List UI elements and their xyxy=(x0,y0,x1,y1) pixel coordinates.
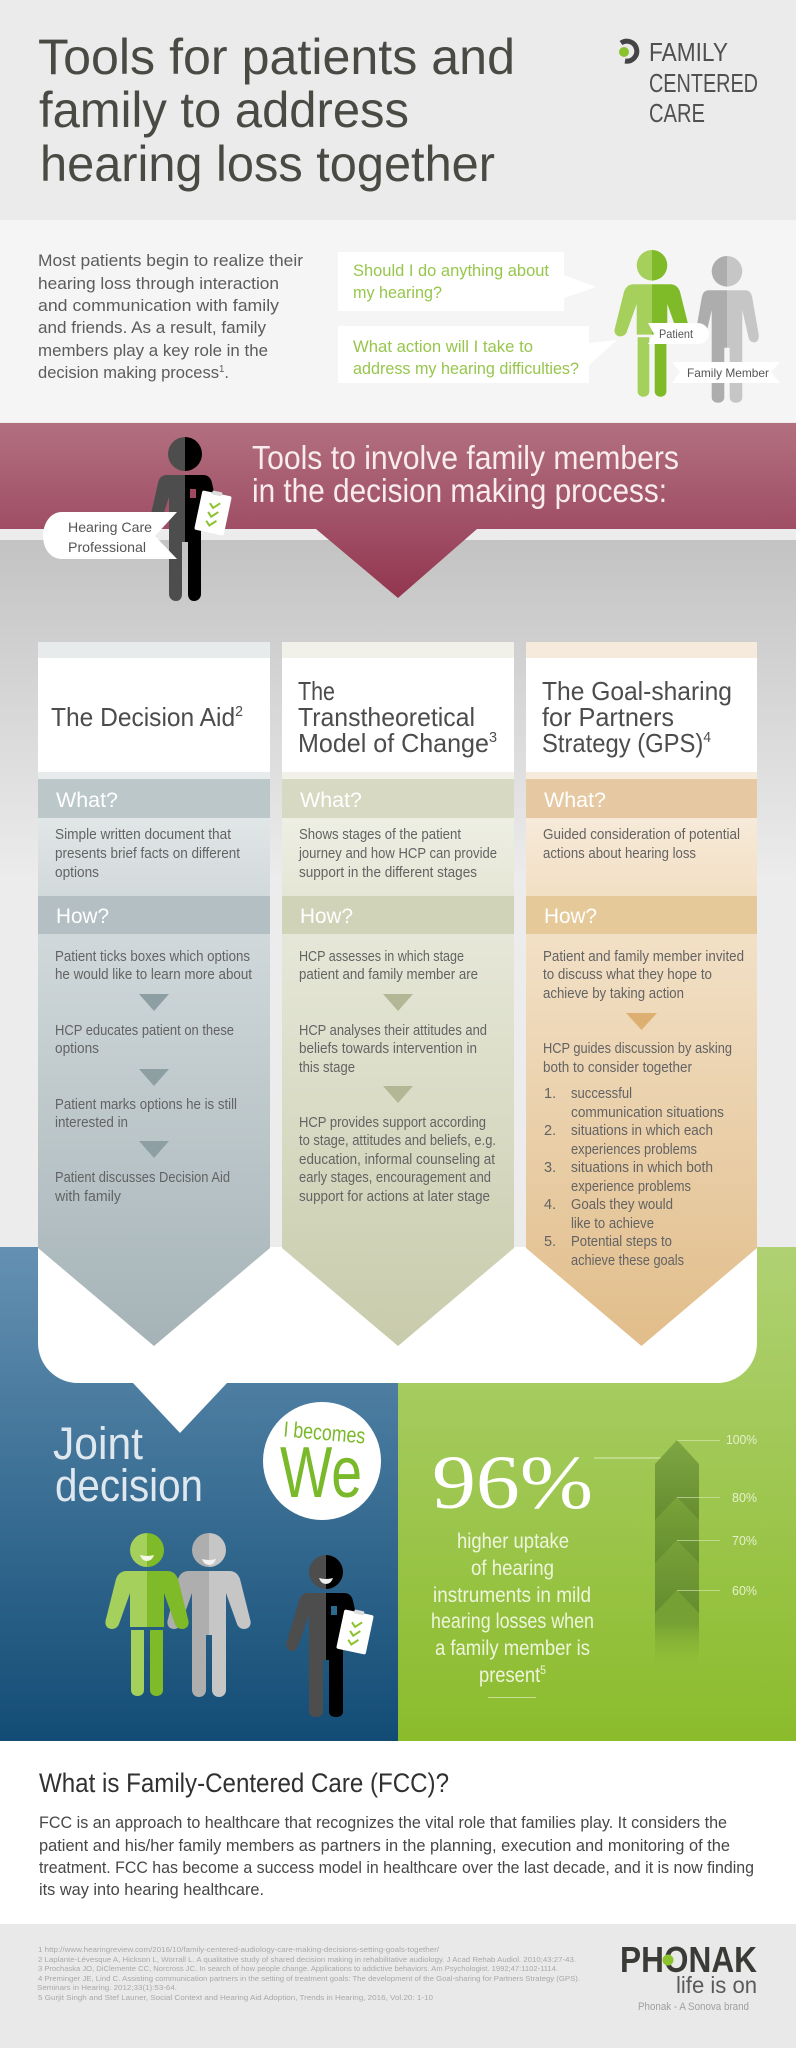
how steps: HCP assesses in which stage xyxy=(299,949,464,965)
how steps xyxy=(299,949,496,1205)
logo wordmark xyxy=(649,37,758,128)
label: hearing care professional: Hearing Care xyxy=(68,519,152,535)
heading xyxy=(542,676,732,758)
Phonak logo: Phonak - A Sonova brand xyxy=(638,2001,749,2013)
statistic: 96%: 96% xyxy=(432,1441,593,1525)
how steps: HCP educates patient on these xyxy=(55,1023,234,1039)
footnotes: 3 Prochaska JO, DiClemente CC, Norcross JC. In search of how people change. Applications to addictive behaviors. Am Psychologist. 1992;47:1102-1114. xyxy=(38,1964,558,1973)
icon: family member figure xyxy=(695,256,759,403)
intro text: Most patients begin to realize their xyxy=(38,251,303,270)
how steps: this stage xyxy=(299,1060,355,1076)
body text xyxy=(39,1813,754,1899)
numbered list: like to achieve xyxy=(571,1216,654,1232)
intro text: . xyxy=(224,363,229,382)
icon: hearing care professional xyxy=(149,437,232,601)
icon: patient figure smiling xyxy=(105,1533,189,1696)
white rounded panel with pointer xyxy=(38,1247,757,1433)
Family Centered Care logo xyxy=(619,37,758,128)
heading: The Goal-sharing xyxy=(542,676,732,706)
footnotes: Seminars in Hearing. 2012;33(1):53-64. xyxy=(37,1983,177,1992)
heading: 3 xyxy=(489,729,497,746)
intro text: decision making process xyxy=(38,363,224,382)
scale labels: 70% xyxy=(732,1533,757,1548)
banner xyxy=(0,423,796,598)
icon: ring with green dot xyxy=(619,41,637,61)
how label: How? xyxy=(544,905,597,928)
title: Tools for patients and xyxy=(38,29,515,85)
logo wordmark: FAMILY xyxy=(649,37,728,67)
what text xyxy=(543,827,740,862)
badge: I becomes We xyxy=(263,1402,381,1520)
numbered list xyxy=(544,1086,724,1269)
what label: What? xyxy=(300,789,362,812)
badge: I becomes We: We xyxy=(280,1433,362,1513)
statistic description xyxy=(431,1530,594,1698)
logo wordmark: CENTERED xyxy=(649,68,758,98)
how steps: to discuss what they hope to xyxy=(543,967,712,983)
body text: patient and his/her family members as partners in the planning, execution and monitoring of the xyxy=(39,1836,730,1855)
Phonak logo xyxy=(620,1939,757,2013)
what text: options xyxy=(55,865,99,881)
intro text: members play a key role in the xyxy=(38,341,268,360)
numbered list: Potential steps to xyxy=(571,1234,672,1250)
heading: for Partners xyxy=(542,702,674,732)
what label: What? xyxy=(56,789,118,812)
numbered list: 1. xyxy=(544,1086,556,1102)
scale labels: 60% xyxy=(732,1583,757,1598)
what text xyxy=(55,827,240,881)
how steps: Patient marks options he is still xyxy=(55,1097,237,1113)
body text: FCC is an approach to healthcare that recognizes the vital role that families play. It considers the xyxy=(39,1813,727,1832)
title xyxy=(38,29,515,192)
what text: Simple written document that xyxy=(55,827,231,843)
heading xyxy=(298,676,497,758)
footnotes: 5 Gurjit Singh and Stef Launer, Social Context and Hearing Aid Adoption, Trends in Hearing, 2016, Vol.20: 1-10 xyxy=(38,1993,433,2002)
how steps xyxy=(54,949,252,1205)
label: patient: Patient xyxy=(659,327,694,341)
intro text: hearing loss through interaction xyxy=(38,274,279,293)
label: hearing care professional xyxy=(43,512,177,559)
how steps: HCP provides support according xyxy=(299,1115,486,1131)
intro text xyxy=(38,251,303,382)
heading: 2 xyxy=(235,703,243,720)
footnotes: 4 Preminger JE, Lind C. Assisting communication partners in the setting of treatment goals: The development of the Goal-sharing for Partners Strategy (GPS). xyxy=(38,1974,580,1983)
what text: actions about hearing loss xyxy=(543,846,696,862)
icon: professional figure smiling xyxy=(286,1555,374,1717)
intro text: 1 xyxy=(219,364,225,375)
numbered list: situations in which each xyxy=(571,1123,713,1139)
numbered list: successful xyxy=(571,1086,632,1102)
how steps: early stages, encouragement and xyxy=(299,1170,491,1186)
speech bubble: second question: What action will I take to xyxy=(353,337,533,356)
heading: Transtheoretical xyxy=(298,702,475,732)
how steps: interested in xyxy=(55,1115,128,1131)
statistic description: a family member is xyxy=(435,1637,590,1660)
label: patient xyxy=(648,323,709,344)
what text: journey and how HCP can provide xyxy=(298,846,497,862)
numbered list: experiences problems xyxy=(571,1142,697,1158)
icon: patient figure xyxy=(615,250,689,397)
body text: treatment. FCC has become a success model in healthcare over the last decade, and it is now finding xyxy=(39,1858,754,1877)
body text: its way into hearing healthcare. xyxy=(39,1880,264,1899)
how steps: to stage, attitudes and beliefs, e.g. xyxy=(299,1133,496,1149)
scale labels: 100% xyxy=(726,1432,757,1447)
joint decision heading: Joint xyxy=(53,1418,143,1469)
panel: column 2, transtheoretical model xyxy=(282,642,514,1346)
numbered list: communication situations xyxy=(571,1105,724,1121)
what text: Shows stages of the patient xyxy=(299,827,461,843)
blue section background xyxy=(0,1247,398,1741)
intro text: and communication with family xyxy=(38,296,280,315)
how steps: Patient ticks boxes which options xyxy=(55,949,250,965)
speech bubble: first question: Should I do anything about xyxy=(353,261,549,280)
speech bubble: first question: my hearing? xyxy=(353,283,442,302)
how steps: education, informal counseling at xyxy=(299,1152,495,1168)
heading: Model of Change xyxy=(298,728,496,758)
label: family member xyxy=(672,362,780,383)
speech bubble: second question: address my hearing difficulties? xyxy=(353,359,579,378)
panel: column 1, the decision aid xyxy=(38,642,270,1346)
chart: upward arrow scale xyxy=(655,1432,757,1672)
how steps: HCP analyses their attitudes and xyxy=(299,1023,487,1039)
page background below banner xyxy=(0,422,796,1250)
panel: footer xyxy=(0,1924,796,2048)
joint decision heading xyxy=(53,1418,203,1511)
speech bubble: first question xyxy=(338,252,596,311)
numbered list: experience problems xyxy=(571,1179,691,1195)
numbered list: 2. xyxy=(544,1123,556,1139)
footnotes: 1 http://www.hearingreview.com/2016/10/family-centered-audiology-care-making-decisions-setting-goals-together/ xyxy=(38,1945,440,1954)
title: hearing loss together xyxy=(40,136,495,192)
speech bubble: second question xyxy=(338,326,617,383)
how steps: beliefs towards intervention in xyxy=(299,1041,477,1057)
banner heading xyxy=(252,439,679,509)
statistic description: 5 xyxy=(540,1663,546,1677)
numbered list: 5. xyxy=(544,1234,556,1250)
what text: support in the different stages xyxy=(299,865,477,881)
statistic description: present xyxy=(479,1664,549,1687)
how label: How? xyxy=(300,905,353,928)
how steps xyxy=(543,949,744,1076)
heading: Strategy (GPS) xyxy=(542,728,718,758)
Phonak logo: life is on xyxy=(676,1972,757,1998)
numbered list: Goals they would xyxy=(571,1197,673,1213)
scale labels xyxy=(726,1432,757,1598)
header background xyxy=(0,0,796,220)
banner heading: Tools to involve family members xyxy=(252,439,679,476)
logo wordmark: CARE xyxy=(649,98,705,128)
heading: 4 xyxy=(703,729,711,746)
heading: What is Family-Centered Care (FCC)? xyxy=(39,1768,449,1798)
joint decision heading: decision xyxy=(55,1460,203,1511)
numbered list: 4. xyxy=(544,1197,556,1213)
numbered list: 3. xyxy=(544,1160,556,1176)
title: family to address xyxy=(39,82,409,138)
heading: The Decision Aid xyxy=(51,702,246,732)
label: family member: Family Member xyxy=(687,366,769,380)
green section background xyxy=(398,1247,796,1741)
how steps: patient and family member are xyxy=(299,967,478,983)
scale labels: 80% xyxy=(732,1490,757,1505)
badge: I becomes We: I becomes xyxy=(283,1416,366,1449)
icon: family member figure smiling xyxy=(167,1533,251,1697)
what text: presents brief facts on different xyxy=(55,846,240,862)
how steps: support for actions at later stage xyxy=(299,1189,490,1205)
how steps: Patient discusses Decision Aid xyxy=(55,1170,230,1186)
panel: column 3, goal-sharing strategy xyxy=(526,642,757,1346)
heading: The xyxy=(298,676,335,706)
how steps: he would like to learn more about xyxy=(55,967,252,983)
how steps: both to consider together xyxy=(543,1060,692,1076)
how steps: achieve by taking action xyxy=(543,986,684,1002)
numbered list: achieve these goals xyxy=(571,1253,684,1269)
statistic description: higher uptake xyxy=(457,1530,569,1553)
footnotes: 2 Laplante-Lévesque A, Hickson L, Worrall L. A qualitative study of shared decision making in rehabilitative audiology. J Acad Rehab Audiol. 2010;43:27-43. xyxy=(38,1955,576,1964)
intro text: and friends. As a result, family xyxy=(38,318,266,337)
scale lines xyxy=(677,1440,720,1591)
panel: intro xyxy=(0,220,796,422)
gray gradient area xyxy=(0,540,796,1250)
how steps: Patient and family member invited xyxy=(543,949,744,965)
how steps: with family xyxy=(54,1189,122,1205)
banner heading: in the decision making process: xyxy=(252,472,667,509)
statistic description: instruments in mild xyxy=(433,1584,591,1607)
what label: What? xyxy=(544,789,606,812)
Phonak logo: PHONAK xyxy=(620,1939,757,1980)
numbered list: situations in which both xyxy=(571,1160,713,1176)
label: hearing care professional: Professional xyxy=(68,539,146,555)
how steps: HCP guides discussion by asking xyxy=(543,1041,732,1057)
footnotes xyxy=(37,1945,580,2002)
what text: Guided consideration of potential xyxy=(543,827,740,843)
what text xyxy=(298,827,497,881)
panel: what is family-centered care xyxy=(0,1741,796,1924)
how steps: options xyxy=(55,1041,99,1057)
how label: How? xyxy=(56,905,109,928)
statistic description: hearing losses when xyxy=(431,1610,594,1633)
statistic description: of hearing xyxy=(471,1557,554,1580)
